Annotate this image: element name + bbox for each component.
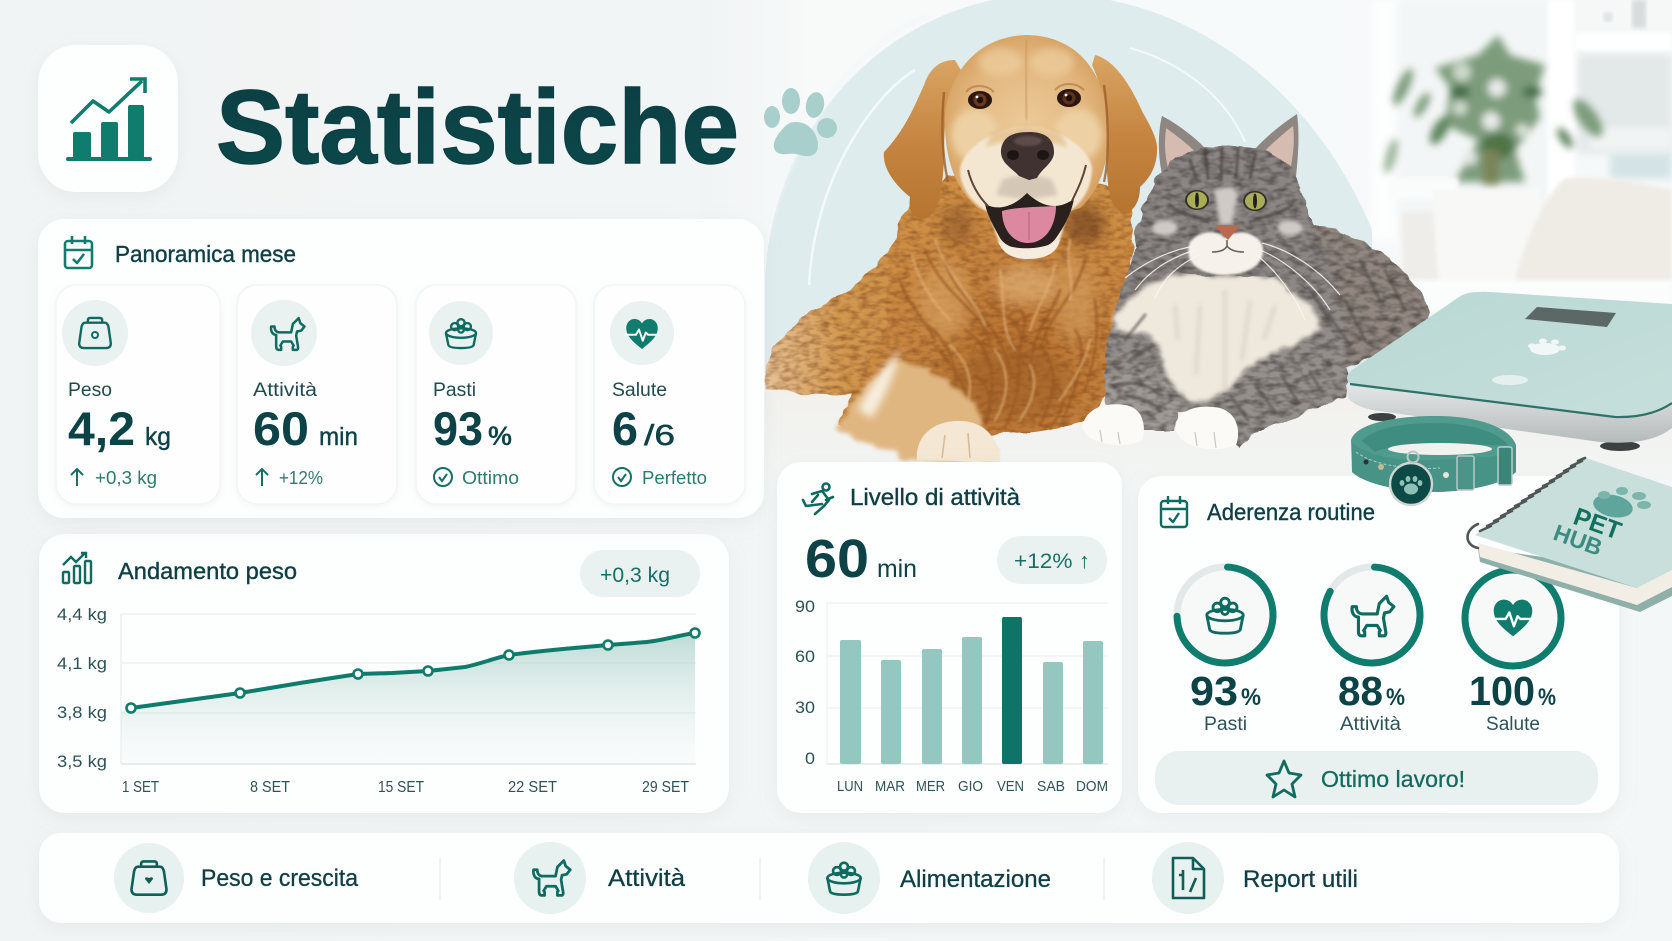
bar chart: GIO [958,778,983,795]
card: Pasti: Pasti [433,380,476,401]
blurred plant [1382,35,1608,185]
ring: Pasti: 93 [1190,668,1238,714]
panel: Aderenza routine [1138,476,1619,813]
cat nose [1214,225,1240,240]
heading: Panoramica mese [115,241,296,267]
dog ears [884,60,962,219]
dog mouth [985,193,1074,250]
item: Attività [514,842,686,914]
item: Peso e crescita: Peso e crescita [201,865,359,892]
icon: paw [764,88,837,156]
bar chart: DOM [1076,778,1108,795]
cat face light patches [1152,186,1303,236]
ring: Pasti: % [1241,684,1261,711]
ring: Attività: Attività [1340,714,1401,735]
icon tile: statistics [38,45,178,192]
icon: runner [803,484,833,514]
ring: Pasti [1175,565,1275,735]
line chart: 4,1 kg [57,654,107,673]
card: Attività: Attività [253,380,317,401]
card: Attività: 60 [253,402,309,455]
card: Attività: min [319,423,358,451]
line chart: 1 SET [122,779,159,796]
card: Salute: Salute [612,380,667,401]
value: 60 [805,529,869,589]
line chart [57,605,700,796]
dog eyes [966,84,1084,109]
heading: Livello di attività [850,484,1021,510]
cat stripes [1115,260,1405,420]
card: Salute: /6 [644,420,675,452]
icon: trend bars [63,553,91,583]
delta pill [580,550,700,597]
item: Attività: Attività [608,865,686,892]
ring: Pasti: Pasti [1204,714,1247,735]
card: Pasti [416,285,576,504]
dog paw [917,421,1000,462]
ring: Salute [1465,570,1561,735]
photo: room background, pets and accessories [764,0,1672,462]
bar chart: MER [916,778,945,795]
cat right foreleg [1190,362,1348,448]
line chart: 22 SET [508,779,557,796]
panel: Livello di attività [777,462,1122,813]
bar chart: 0 [805,749,815,768]
line chart: 3,5 kg [57,752,107,771]
card: Salute: Perfetto [642,467,707,488]
dog head [945,35,1107,216]
card: Attività: +12% [279,467,323,488]
line chart: 29 SET [642,779,689,796]
delta pill: +0,3 kg [600,564,670,587]
panel: Andamento peso [39,534,729,813]
card: Peso: kg [145,423,171,451]
card: Pasti: % [488,421,512,451]
icon: cat [1082,114,1430,449]
bar chart [795,597,1108,795]
dog tongue [1002,206,1056,243]
cat chest [1110,273,1322,405]
ring: Salute: Salute [1486,714,1540,735]
cat torso [1105,208,1348,418]
card: Salute [594,285,745,504]
dog front leg [838,362,1000,462]
item: Report utili [1152,842,1358,914]
dog mane fur strokes [900,250,1097,428]
item: Alimentazione: Alimentazione [900,866,1051,893]
cat whiskers [1125,243,1340,320]
line chart: 3,8 kg [57,703,107,722]
ring: Salute: 100 [1469,668,1535,714]
blurred pot and pillow [1388,178,1672,310]
delta pill [997,536,1107,584]
icon: notebook [1468,457,1672,612]
item: Peso e crescita [114,843,359,913]
icon: calendar [1161,496,1187,527]
ring: Salute: % [1538,684,1556,711]
card: Peso [56,285,220,504]
ring: Attività: % [1386,684,1405,711]
notebook label: PET [1570,503,1625,546]
dog nose [1001,132,1054,180]
heading: Andamento peso [118,558,297,584]
bar chart: LUN [837,778,863,795]
dog mane [838,170,1133,439]
bar chart: 30 [795,698,815,717]
callout: Ottimo lavoro [1155,751,1598,805]
icon: notebook: HUB [1550,519,1606,561]
blurred room [700,0,1672,400]
dog muzzle [960,126,1092,255]
line chart: 15 SET [378,779,424,796]
cat ears [1159,116,1215,185]
card: Peso: Peso [68,380,112,401]
delta pill: +12% ↑ [1014,549,1090,573]
item: Alimentazione [808,842,1051,914]
ring: Attività [1322,565,1422,735]
value [805,529,917,589]
icon: collar [1351,416,1516,505]
floor [765,385,1672,480]
dog back [765,240,960,420]
icon: dog [765,35,1157,462]
collar tag [1390,463,1432,505]
icon: scale [1346,292,1672,451]
bar chart: 60 [795,647,815,666]
cat paws [1082,404,1144,445]
cat head [1136,146,1316,277]
item: Report utili: Report utili [1243,866,1358,893]
value: min [877,555,917,583]
ring: Attività: 88 [1338,668,1383,714]
heading: Aderenza routine [1207,499,1375,525]
card: Salute: 6 [612,402,638,455]
icon: calendar [65,236,92,268]
notebook paw [1591,491,1635,521]
bar chart: MAR [875,778,905,795]
dog mane shading [919,205,1105,420]
cat left foreleg [1105,372,1180,430]
line chart: 8 SET [250,779,290,796]
card: Attività [237,285,397,504]
cat muzzle [1188,232,1263,275]
bar chart: VEN [997,778,1024,795]
card: Pasti: Ottimo [462,467,519,488]
cat eyes [1185,190,1267,211]
card: Peso: +0,3 kg [95,467,157,488]
cat rear body [1290,226,1430,395]
panel: Panoramica mese [38,219,764,518]
title: Statistiche [216,69,739,186]
bar chart: 90 [795,597,815,616]
card: Pasti: 93 [433,402,483,455]
callout: Ottimo lavoro: Ottimo lavoro! [1321,766,1465,792]
line chart: 4,4 kg [57,605,107,624]
bottom navigation strip [39,833,1619,923]
card: Peso: 4,2 [68,402,135,455]
notebook spiral [1468,458,1585,548]
dog chin [998,239,1060,259]
bar chart: SAB [1037,778,1065,795]
